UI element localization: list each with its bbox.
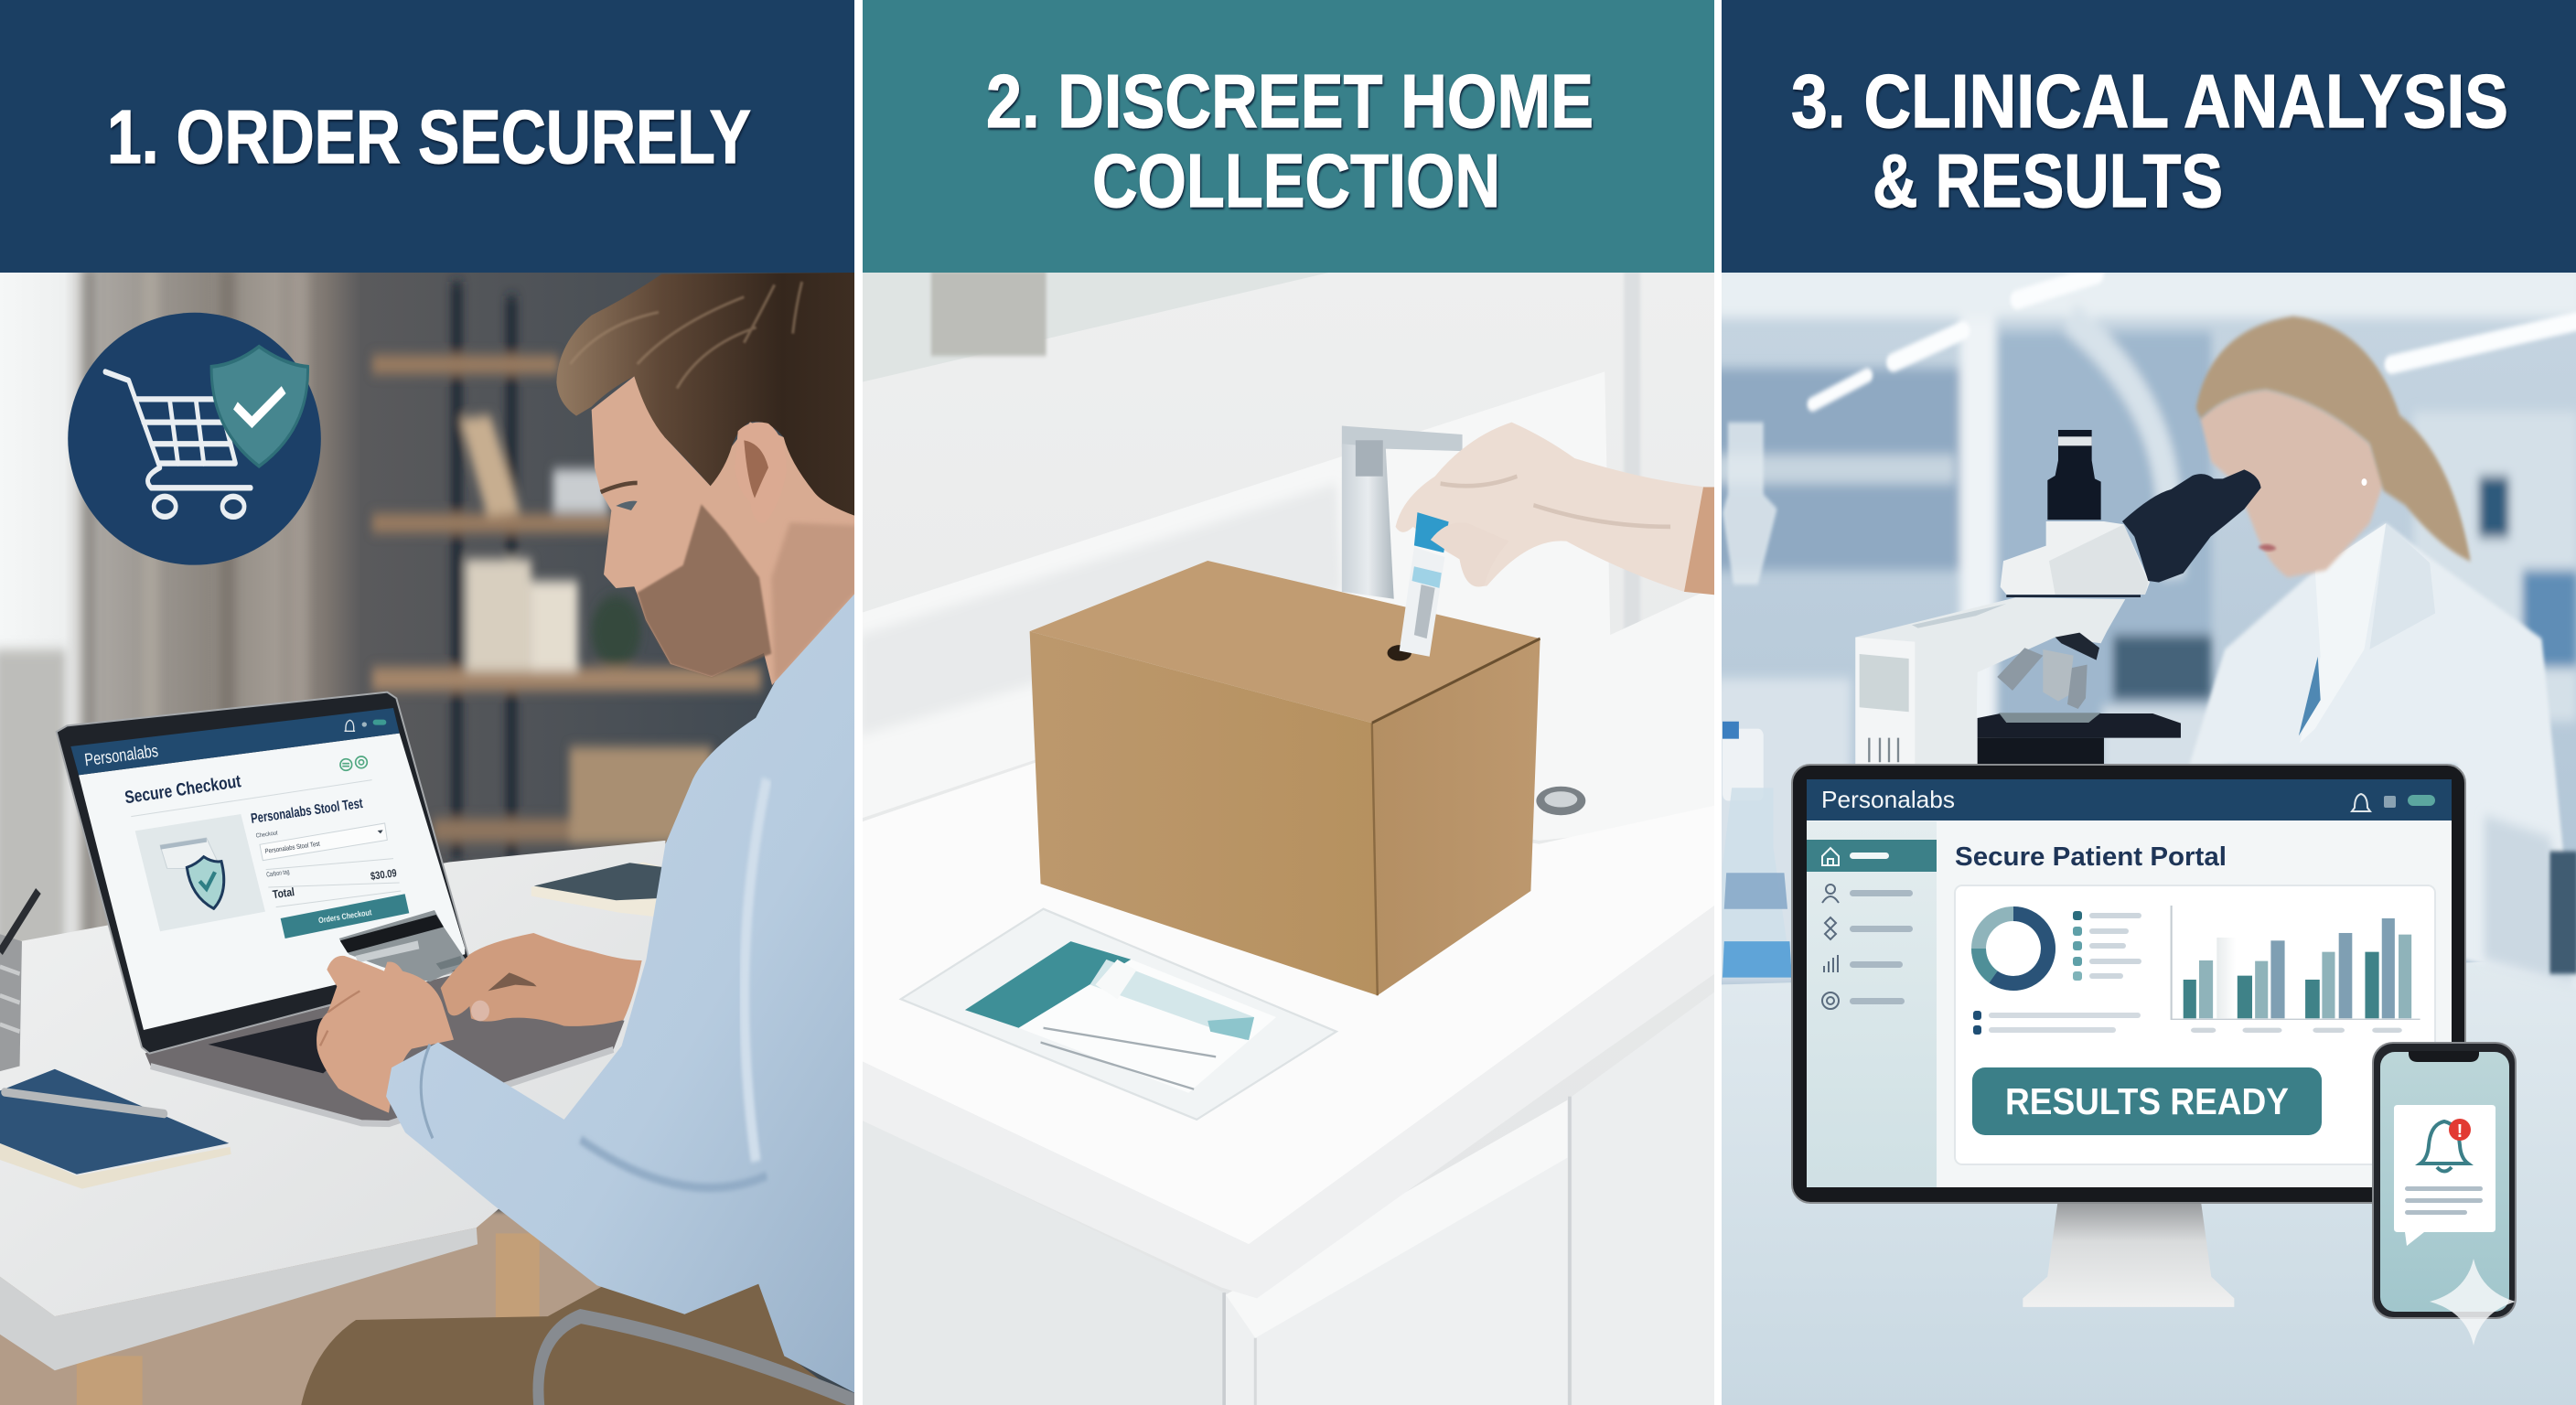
icon: alert badge: !: [2457, 1121, 2463, 1142]
desk: [0, 841, 665, 1316]
gloved hand: [1396, 423, 1720, 595]
hair: [2196, 316, 2471, 562]
results ready button: RESULTS READY: [2005, 1080, 2289, 1122]
flasks and bottle: [1723, 423, 1792, 978]
price rows: [266, 866, 401, 907]
header band: step 3: [1722, 0, 2576, 273]
product title: Personalabs Stool Test: [250, 796, 364, 827]
donut legend: [1973, 911, 2141, 1035]
portal sidebar: [1807, 821, 1937, 1187]
chair: [538, 1316, 860, 1405]
brand: personalabs: Personalabs: [1821, 786, 1955, 813]
drain: [1536, 787, 1585, 815]
checkout button: Orders Checkout: [317, 907, 372, 925]
price rows: Total: [272, 885, 295, 901]
hair: [556, 273, 857, 517]
panel: step 1 order securely: [0, 0, 860, 1405]
header band: step 1: [0, 0, 854, 273]
head and eyepieces: [2001, 430, 2261, 596]
trousers: [300, 1201, 860, 1405]
icon: shopping cart and shield: [68, 313, 321, 565]
hands and credit card: [317, 910, 642, 1113]
blurred lab background: [1714, 267, 2576, 981]
heading: secure checkout: Secure Checkout: [123, 772, 242, 808]
faucet: [1342, 426, 1463, 599]
sealed test kit pouch: [901, 909, 1336, 1120]
laptop screen: [57, 692, 469, 1054]
notebook: [0, 1069, 231, 1189]
cabinet: [860, 988, 1720, 1405]
heading: 3. clinical analysis and results: [1791, 59, 2508, 223]
shirt: [386, 588, 860, 1396]
scene: man at laptop: [0, 267, 860, 1405]
head: [556, 273, 857, 685]
laptop base: [145, 971, 625, 1124]
arm front face: [1855, 604, 2006, 764]
checkout dropdown: Checkout: [255, 830, 278, 840]
sample tube: [1400, 512, 1449, 657]
heading: 2. discreet home collection: COLLECTION: [1092, 138, 1500, 223]
objectives: [1997, 633, 2099, 709]
sink basin: [860, 371, 1720, 841]
pen holder: [0, 891, 38, 1071]
brand: personalabs: Personalabs: [83, 742, 159, 770]
results card: [1955, 885, 2435, 1164]
price rows: $30.09: [370, 866, 398, 883]
icon: alert badge: [2449, 1119, 2471, 1142]
illustration panel with shield: [135, 814, 265, 931]
panel: step 2 discreet home collection: [860, 0, 1720, 1405]
price rows: Carbon tag: [266, 867, 290, 879]
microscope: [1855, 430, 2261, 765]
counter: [860, 759, 1720, 1244]
mirror: [860, 271, 1336, 382]
arm: [1855, 597, 2125, 764]
face and neck: [592, 376, 857, 685]
notification bubble: [2394, 1105, 2496, 1246]
heading: secure patient portal: Secure Patient Portal: [1955, 842, 2227, 872]
heading: 2. discreet home collection: 2. DISCREET HOME: [986, 59, 1594, 144]
hand holding card: [317, 956, 454, 1113]
stage: [1978, 713, 2181, 765]
gloved thumb: [1431, 522, 1508, 586]
hand on keyboard: [441, 933, 642, 1026]
green trust badges: [340, 756, 367, 770]
scientist: [2189, 316, 2576, 988]
portal top bar: [1807, 779, 2452, 820]
scene: laboratory with portal: [1714, 267, 2576, 1405]
donut chart: [1979, 914, 2048, 983]
phone with notification: [2373, 1043, 2516, 1318]
icon: bell: [2420, 1121, 2468, 1171]
sparkle mark: [2430, 1259, 2516, 1346]
scene: kit at bathroom vanity: [860, 271, 1720, 1405]
checkout dropdown: [255, 823, 387, 861]
icon: credit card: [339, 910, 468, 981]
checkout dropdown: Personalabs Stool Test: [264, 840, 320, 855]
small notebook: [531, 862, 662, 917]
checkout button: [281, 894, 409, 938]
results ready button: [1972, 1067, 2322, 1135]
face: [2200, 390, 2383, 577]
ear: [735, 423, 787, 523]
bar chart: [2172, 906, 2420, 1033]
heading: 2. discreet home collection: [986, 59, 1594, 223]
monitor with patient portal: [1792, 765, 2465, 1203]
floor: [0, 1212, 603, 1405]
cardboard box: [1030, 561, 1540, 995]
header band: step 2: [863, 0, 1714, 273]
heading: 3. clinical analysis and results: & RESULTS: [1873, 138, 2223, 223]
panel: step 3 clinical analysis and results: [1714, 0, 2576, 1405]
monitor stand: [2023, 1197, 2234, 1307]
screen header bar: [70, 708, 400, 775]
heading: 1. order securely: 1. ORDER SECURELY: [107, 94, 751, 179]
desk surface: [1720, 960, 2576, 1405]
